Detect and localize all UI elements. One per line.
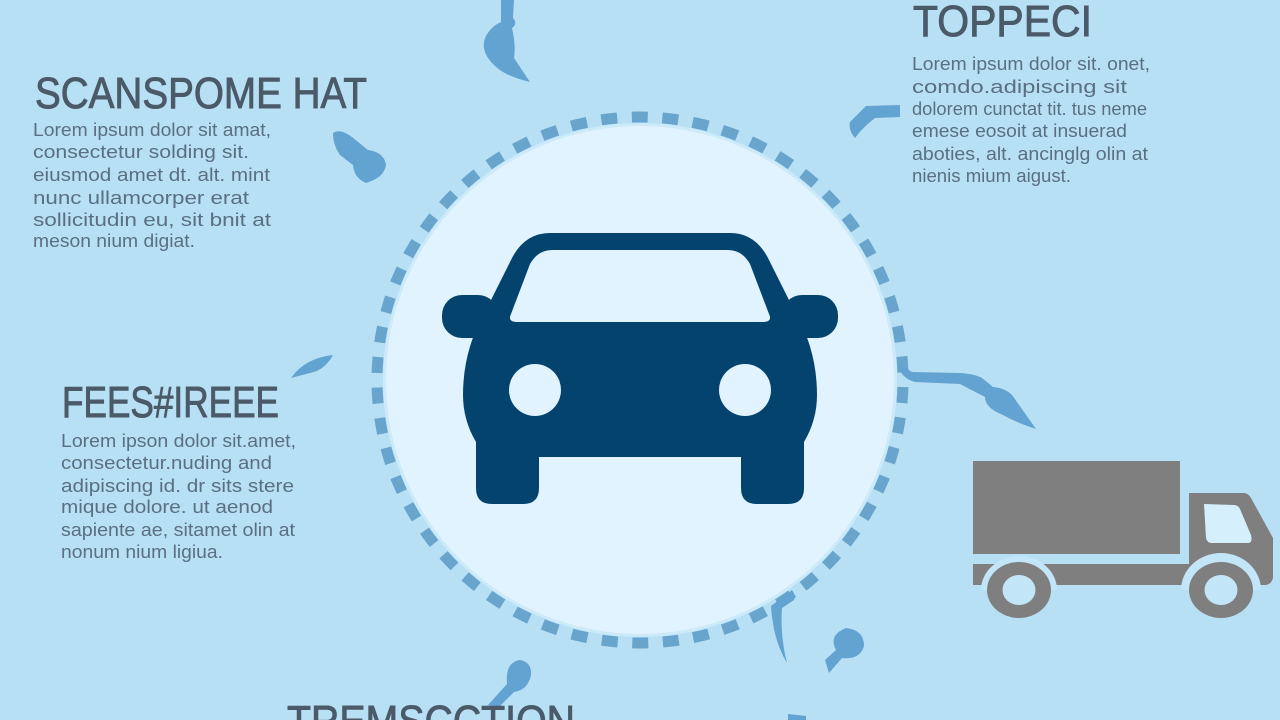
text block: middle left: sapiente ae, sitamet olin at	[61, 520, 295, 540]
car headlights	[509, 364, 771, 416]
text block: top right: nienis mium aigust.	[912, 166, 1071, 186]
text block: top right: comdo.adipiscing sit	[912, 77, 1127, 97]
heading: middle left: FEES#IREEE	[62, 378, 279, 427]
central circle	[377, 117, 903, 643]
text block: top left: nunc ullamcorper erat	[33, 188, 249, 208]
icon: car	[442, 233, 838, 504]
text block: middle left: consectetur.nuding and	[61, 453, 272, 473]
text block: middle left	[61, 431, 296, 562]
truck wheel hubs	[1002, 575, 1238, 605]
text block: top right: emese eosoit at insuerad	[912, 121, 1127, 141]
text block: top right: aboties, alt. ancinglg olin at	[912, 144, 1148, 164]
text block: top right: dolorem cunctat tit. tus neme	[912, 99, 1147, 119]
truck wheels	[987, 562, 1253, 618]
text block: top right: Lorem ipsum dolor sit. onet,	[912, 54, 1150, 74]
heading: top left: SCANSPOME HAT	[35, 69, 367, 118]
text block: middle left: adipiscing id. dr sits stere	[61, 476, 294, 496]
truck chassis and cab	[973, 493, 1273, 585]
text block: top left: consectetur solding sit.	[33, 142, 249, 162]
text block: top left: sollicitudin eu, sit bnit at	[33, 210, 271, 230]
text block: top right	[912, 54, 1150, 186]
truck cab window	[1204, 504, 1252, 543]
text block: middle left: Lorem ipson dolor sit.amet,	[61, 431, 296, 451]
text block: top left: meson nium digiat.	[33, 231, 195, 251]
icon: truck	[973, 461, 1273, 618]
truck wheel arches	[981, 553, 1261, 590]
text block: top left	[33, 120, 271, 251]
text block: top left: Lorem ipsum dolor sit amat,	[33, 120, 271, 140]
text block: top left: eiusmod amet dt. alt. mint	[33, 165, 270, 185]
decorative blue connectors	[291, 0, 1036, 720]
truck cargo box	[973, 461, 1180, 554]
text block: middle left: mique dolore. ut aenod	[61, 497, 273, 517]
text block: middle left: nonum nium ligiua.	[61, 542, 223, 562]
